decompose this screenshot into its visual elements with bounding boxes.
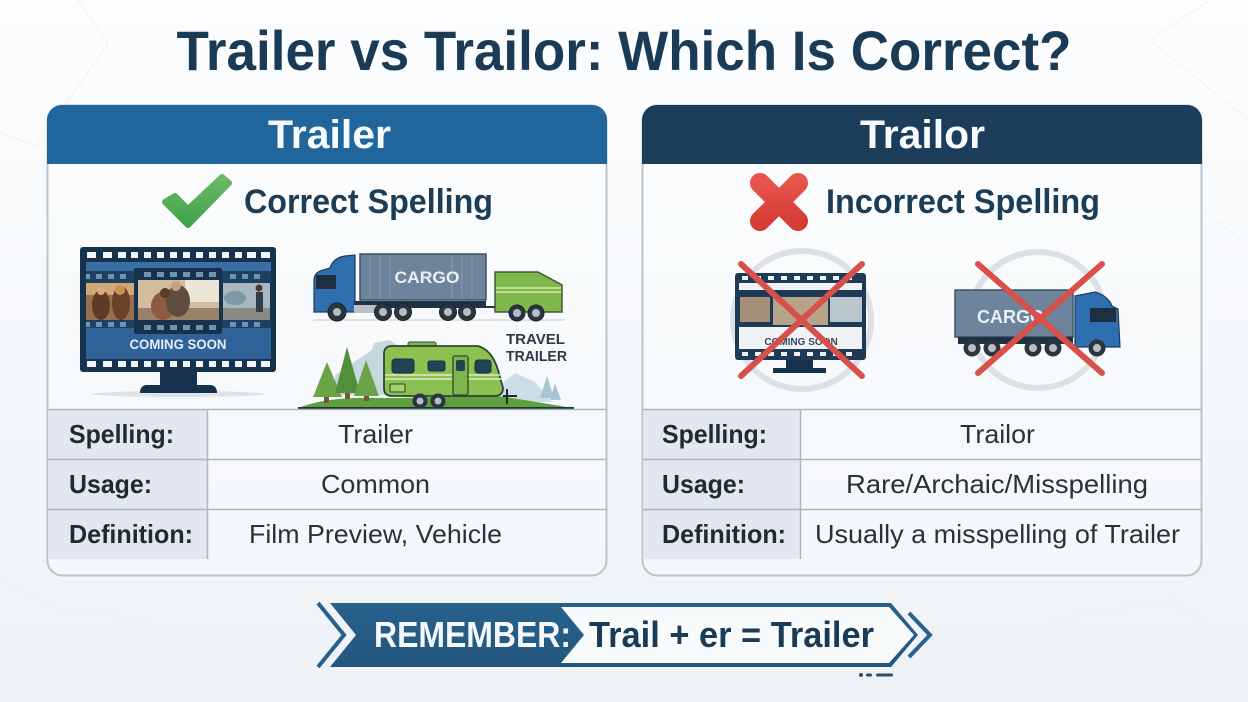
comparison table: Trailer: Trailer xyxy=(338,419,413,449)
icon: monitor with film strip xyxy=(80,247,276,397)
comparison table: Trailer xyxy=(48,409,607,559)
decorative dashes xyxy=(859,673,893,677)
comparison table: Trailor: Usage: xyxy=(662,469,745,499)
comparison table: Trailor: Definition: xyxy=(662,519,786,549)
panel header: Trailor xyxy=(642,105,1202,164)
icon: crossed-out monitor: COMING SOON xyxy=(764,337,838,348)
panel header: Trailer xyxy=(47,105,607,164)
icon: green check mark xyxy=(165,177,229,225)
banner: remember: Trail + er = Trailer xyxy=(589,614,874,655)
comparison table: Trailor: Trailor xyxy=(960,419,1035,449)
icon: red X mark xyxy=(760,183,798,221)
comparison table: Trailor: Spelling: xyxy=(662,419,767,449)
icon: monitor with film strip: COMING SOON xyxy=(130,337,226,352)
panel header: Trailer: Trailer xyxy=(268,113,391,157)
panel header: Trailor: Trailor xyxy=(860,113,985,157)
icon: cargo truck with green trailer xyxy=(313,254,565,321)
heading: correct spelling: Correct Spelling xyxy=(244,183,493,221)
comparison table: Trailor: Usually a misspelling of Trailer xyxy=(815,519,1180,549)
banner: remember: REMEMBER: xyxy=(374,614,571,655)
icon: cargo truck with green trailer: CARGO xyxy=(394,268,460,287)
comparison table: Trailer: Common xyxy=(321,469,430,499)
banner: remember xyxy=(318,603,930,677)
comparison table: Trailer: Spelling: xyxy=(69,419,174,449)
icon: crossed-out truck: CARGO xyxy=(977,307,1044,327)
label: travel trailer: TRAVEL xyxy=(506,332,565,348)
title: Trailer vs Trailor: Which Is Correct? xyxy=(176,19,1072,82)
icon: travel trailer caravan in landscape xyxy=(298,340,574,409)
arrow: left chevron xyxy=(318,603,344,667)
comparison table: Trailer: Usage: xyxy=(69,469,152,499)
panel: Trailer xyxy=(47,105,607,576)
heading: incorrect spelling: Incorrect Spelling xyxy=(826,183,1100,221)
arrow: right chevron xyxy=(909,613,930,657)
comparison table: Trailor: Rare/Archaic/Misspelling xyxy=(846,469,1148,499)
label: travel trailer: TRAILER xyxy=(506,349,567,365)
icon: red cross over monitor xyxy=(741,264,862,376)
icon: crossed-out monitor xyxy=(733,251,871,389)
icon: red cross over truck xyxy=(978,264,1102,373)
comparison table: Trailor xyxy=(643,409,1202,559)
comparison table: Trailer: Definition: xyxy=(69,519,193,549)
comparison table: Trailer: Film Preview, Vehicle xyxy=(249,519,502,549)
panel: Trailor xyxy=(642,105,1202,576)
icon: crossed-out truck xyxy=(955,252,1120,388)
